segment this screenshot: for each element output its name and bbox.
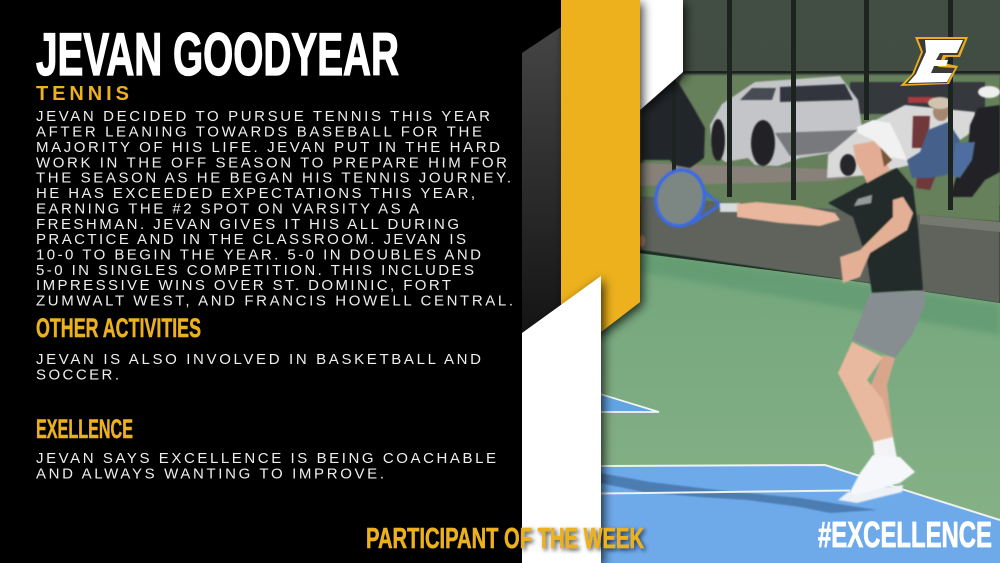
- photo: wheel: [751, 120, 775, 166]
- photo: wall cap: [920, 215, 1000, 232]
- photo: small corner lines: [600, 394, 659, 412]
- logo on shirt: [854, 195, 872, 206]
- body text: biography: 5-0 IN SINGLES COMPETITION. THIS INCLUDES: [36, 262, 474, 279]
- body text: biography: [36, 108, 513, 310]
- body text: biography: HE HAS EXCEEDED EXPECTATIONS THIS YEAR,: [36, 185, 475, 202]
- background: black panel: [0, 0, 610, 563]
- photo: suv side window: [740, 88, 776, 100]
- photo: spectator hat: [928, 97, 952, 109]
- graphic: white top band: [640, 0, 683, 110]
- graphic: white lower band: [522, 276, 601, 563]
- photo: white car behind player: [827, 105, 975, 178]
- photo: white car wheel: [840, 154, 856, 176]
- photo: green court: [601, 253, 1000, 519]
- body text: biography: JEVAN DECIDED TO PURSUE TENNIS THIS YEAR: [36, 108, 490, 125]
- body text: other activities: SOCCER.: [36, 366, 119, 384]
- photo: court lines: [600, 465, 1000, 520]
- body text: other activities: JEVAN IS ALSO INVOLVED IN BASKETBALL AND: [36, 351, 481, 368]
- photo: spectator blue: [907, 122, 960, 178]
- photo: spectator head: [932, 107, 948, 122]
- title: JEVAN GOODYEAR: [36, 21, 399, 88]
- photo: grass behind fence: [640, 75, 1000, 222]
- forearm: [737, 202, 840, 226]
- photo: spectator dark: [950, 105, 1000, 197]
- rear arm: [840, 197, 913, 283]
- photo: far car tail light: [908, 97, 934, 103]
- logo dark inner: [905, 39, 965, 84]
- body text: biography: FRESHMAN. JEVAN GIVES IT HIS ALL DURING: [36, 216, 459, 233]
- back leg: [865, 355, 895, 442]
- neck and face: [853, 140, 890, 183]
- graphic: dark slanted band: [522, 27, 561, 333]
- photo: fence rail and posts: [640, 0, 1000, 210]
- photo: far parked cars: [850, 82, 985, 114]
- photo: partner hand: [639, 235, 645, 247]
- cap: [857, 120, 907, 160]
- photo: tennis player on court: [600, 0, 1000, 563]
- photo: suv bumper: [775, 130, 858, 156]
- body text: excellence: AND ALWAYS WANTING TO IMPROVE.: [36, 466, 384, 482]
- photo: wheel left: [711, 119, 725, 161]
- photo: player shadow: [600, 473, 877, 513]
- heading: other activities: OTHER ACTIVITIES: [36, 313, 201, 343]
- logo: E: [900, 37, 968, 86]
- photo: suv rear window: [780, 84, 853, 102]
- body text: biography: IMPRESSIVE WINS OVER ST. DOMINIC, FORT: [36, 277, 451, 294]
- photo: spectator jeans: [952, 142, 975, 178]
- photo: trees and background: [600, 0, 1000, 205]
- photo: spectator white hat: [978, 86, 1000, 98]
- body text: biography: 10-0 TO BEGIN THE YEAR. 5-0 IN DOUBLES AND: [36, 246, 481, 264]
- shorts: [852, 291, 925, 358]
- body text: biography: EARNING THE #2 SPOT ON VARSITY AS A: [36, 200, 419, 217]
- back shoe: [838, 485, 903, 503]
- heading: exellence: EXELLENCE: [36, 414, 133, 444]
- graphic: gold band: [561, 0, 640, 332]
- racket handle: [720, 203, 740, 212]
- sock: [873, 437, 897, 460]
- torso: [828, 168, 923, 293]
- footer label: participant of the week: PARTICIPANT OF THE WEEK: [366, 523, 644, 555]
- body text: biography: THE SEASON AS HE BEGAN HIS TENNIS JOURNEY.: [36, 170, 511, 187]
- body text: other activities: [36, 351, 481, 384]
- photo: red chair: [912, 116, 940, 190]
- photo: dark suv: [641, 82, 705, 168]
- racket head: [653, 168, 707, 228]
- logo letter: [908, 40, 963, 83]
- body text: biography: WORK IN THE OFF SEASON TO PREPARE HIM FOR: [36, 154, 507, 171]
- logo outline: [900, 37, 968, 86]
- photo: player: [651, 120, 925, 503]
- photo: court shadow band: [640, 252, 1000, 335]
- photo: pavement: [640, 163, 860, 186]
- body text: excellence: [36, 450, 496, 482]
- photo: concrete wall: [640, 197, 1000, 303]
- body text: biography: AFTER LEANING TOWARDS BASEBALL FOR THE: [36, 124, 482, 140]
- body text: biography: PRACTICE AND IN THE CLASSROOM. JEVAN IS: [36, 231, 466, 248]
- hair: [880, 146, 892, 167]
- racket throat: [691, 190, 720, 224]
- front leg: [838, 342, 893, 442]
- body text: excellence: JEVAN SAYS EXCELLENCE IS BEING COACHABLE: [36, 450, 496, 467]
- body text: biography: MAJORITY OF HIS LIFE. JEVAN PUT IN THE HARD: [36, 139, 500, 156]
- photo: blue court: [600, 465, 1000, 563]
- photo: white suv: [710, 76, 862, 166]
- front shoe: [850, 455, 915, 495]
- sport label: TENNIS: [36, 83, 129, 105]
- body text: biography: ZUMWALT WEST, AND FRANCIS HOWELL CENTRAL.: [36, 292, 513, 310]
- photo: small blue corner: [600, 394, 661, 412]
